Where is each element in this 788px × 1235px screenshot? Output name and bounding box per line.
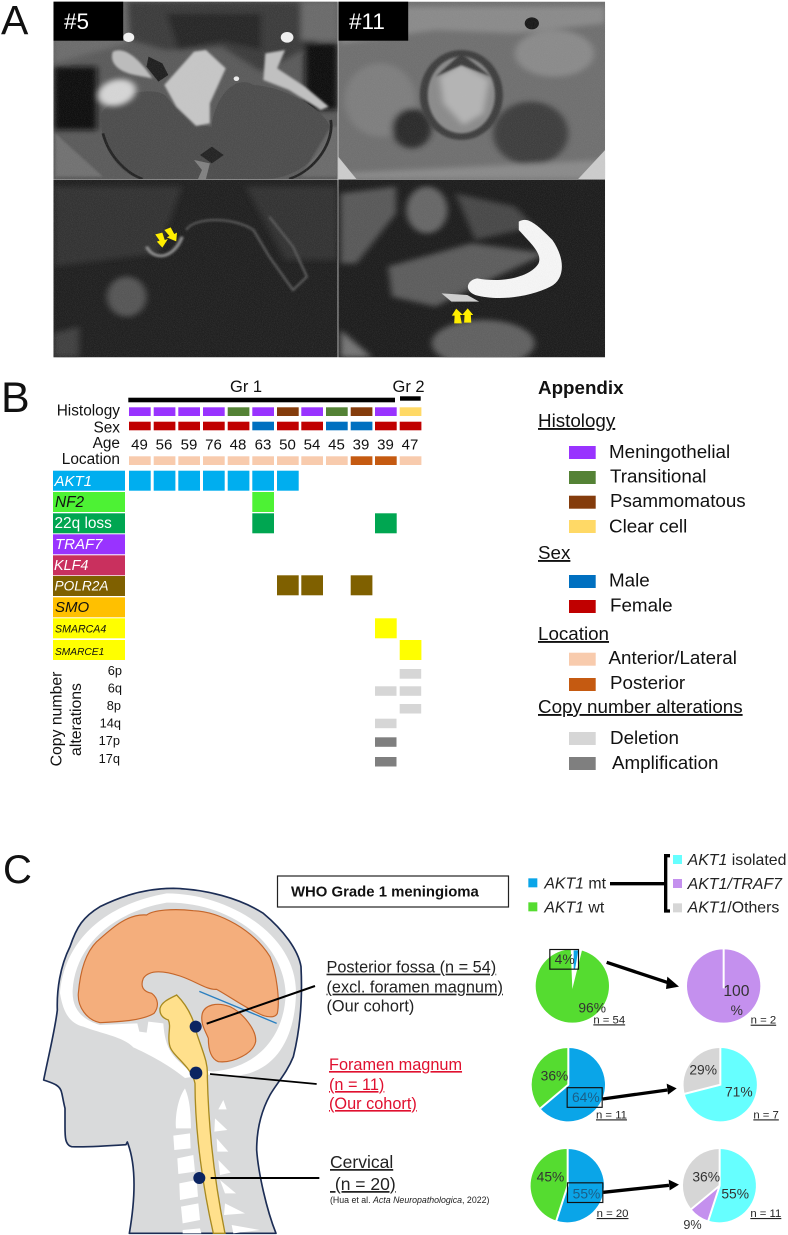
site label: foramen magnum: Foramen magnum: [329, 1056, 462, 1074]
MRI: case 11 CT myelography: [338, 179, 605, 367]
age row: 48: [230, 436, 246, 454]
copy number matrix: [375, 669, 421, 766]
site label: cervical: [330, 1152, 490, 1205]
site label: posterior fossa: [326, 959, 503, 1016]
appendix legend: Deletion: [610, 727, 679, 748]
pie: cervical co-mutation: 55%: [721, 1185, 749, 1201]
case label 5: #5: [64, 9, 89, 34]
pie: posterior fossa co-mutation: [687, 948, 776, 1027]
gene labels: SMO: [55, 599, 90, 616]
row labels: Age: [93, 435, 120, 452]
yellow arrows: case 11: [452, 308, 473, 323]
case label 11: [338, 2, 408, 41]
appendix legend: Psammomatous: [610, 490, 746, 511]
age row: 39: [353, 436, 369, 454]
appendix legend: Posterior: [610, 672, 685, 693]
site label: cervical: (n = 20): [330, 1174, 396, 1194]
gene labels: NF2: [55, 494, 85, 511]
pie: posterior fossa AKT1: 4%: [555, 951, 575, 967]
site markers: [190, 1021, 205, 1184]
pie: posterior fossa AKT1: 96%: [578, 1000, 606, 1016]
age row: 45: [328, 436, 345, 454]
appendix legend: Amplification: [612, 752, 718, 773]
arrow: [603, 1084, 677, 1099]
pie: cervical co-mutation: [683, 1148, 781, 1232]
copy number labels: 17p: [99, 733, 120, 748]
appendix legend: [538, 377, 746, 773]
histology track: [129, 407, 421, 416]
appendix legend: Appendix: [538, 377, 624, 398]
copy number labels: 8p: [107, 698, 121, 713]
gene labels: 22q loss: [54, 515, 112, 532]
panel label B: B: [1, 374, 30, 422]
site label: foramen magnum: (Our cohort): [329, 1095, 417, 1113]
pie: cervical co-mutation: 36%: [692, 1169, 720, 1185]
dura: [73, 903, 286, 1072]
pie: foramen magnum AKT1: 36%: [541, 1067, 568, 1083]
site label: foramen magnum: (n = 11): [329, 1076, 384, 1094]
appendix legend: Copy number alterations: [538, 696, 743, 717]
case label 5: [54, 2, 123, 41]
age row: 49: [131, 436, 148, 454]
pie: foramen magnum AKT1: 64%: [572, 1089, 600, 1105]
gene labels: TRAF7: [55, 536, 103, 553]
copy number labels: 17q: [99, 751, 120, 766]
copy number labels: 6p: [108, 663, 122, 678]
pie: cervical AKT1: [531, 1148, 628, 1222]
gene labels: KLF4: [54, 558, 88, 574]
row labels: Sex: [93, 420, 120, 436]
legend bracket: [610, 856, 670, 911]
pie: foramen magnum AKT1: n = 11: [596, 1109, 627, 1121]
grade headers: [128, 378, 425, 402]
copy number labels: [48, 663, 122, 766]
sex track: [129, 422, 421, 430]
title box: WHO grade: WHO Grade 1 meningioma: [291, 885, 480, 901]
grade headers: Gr 1: [230, 378, 262, 396]
title box: WHO grade: [278, 876, 508, 907]
appendix legend: Meningothelial: [609, 441, 730, 462]
legend: co-mutation: AKT1 isolated: [687, 852, 786, 869]
appendix legend: Clear cell: [609, 516, 687, 537]
legend: AKT1 status: AKT1 mt: [543, 875, 607, 892]
gene labels: SMARCE1: [55, 647, 104, 658]
legend: co-mutation: AKT1/Others: [687, 900, 779, 917]
pie: cervical co-mutation: n = 11: [750, 1208, 781, 1220]
gene labels: AKT1: [54, 473, 92, 490]
copy number labels: alterations: [68, 683, 85, 756]
case label 11: #11: [349, 9, 385, 34]
panel label C: C: [3, 848, 32, 892]
appendix legend: Male: [609, 570, 650, 591]
legend: AKT1 status: [528, 875, 607, 916]
appendix legend: Anterior/Lateral: [608, 647, 737, 668]
age row: 47: [402, 436, 418, 454]
vertebrae: [173, 1088, 260, 1233]
panel A: MRI images: [53, 2, 605, 367]
pie: cervical AKT1: 55%: [573, 1185, 600, 1201]
pie: posterior fossa AKT1: n = 54: [593, 1014, 625, 1026]
MRI: case 11 axial contrast: [338, 2, 605, 179]
pie: posterior fossa AKT1: [536, 948, 625, 1026]
pie: foramen magnum AKT1: [532, 1047, 627, 1121]
cerebellum: [202, 1004, 256, 1062]
head outline: [44, 888, 301, 1233]
gene labels: [53, 471, 125, 660]
location track: [129, 456, 421, 465]
pie: foramen magnum co-mutation: n = 7: [753, 1109, 779, 1121]
gene labels: SMARCA4: [55, 624, 106, 636]
pie: cervical co-mutation: 9%: [683, 1218, 702, 1232]
legend: AKT1 status: AKT1 wt: [543, 899, 605, 916]
pie: posterior fossa co-mutation: 100: [723, 983, 750, 1000]
appendix legend: Location: [538, 623, 609, 644]
copy number labels: 6q: [108, 680, 122, 696]
grade headers: Gr 2: [392, 378, 425, 396]
site label: cervical: (Hua et al. Acta Neuropathologica, 2022): [330, 1195, 490, 1205]
panel B: oncoprint: [48, 378, 425, 766]
pie charts and legend: [528, 852, 786, 1232]
appendix legend: Transitional: [610, 466, 706, 487]
row labels: Location: [62, 451, 120, 468]
site label: cervical: Cervical: [330, 1152, 393, 1172]
copy number labels: 14q: [100, 716, 121, 730]
appendix legend: Sex: [538, 542, 571, 563]
age row: 54: [304, 436, 320, 454]
yellow arrows: case 5: [155, 227, 177, 248]
pie: cervical AKT1: n = 20: [597, 1208, 628, 1220]
age row: 56: [156, 436, 172, 454]
MRI: case 5 CISS: [53, 179, 338, 357]
age row: 39: [377, 436, 394, 454]
MRI: case 5 axial contrast: [53, 2, 338, 179]
age row: 63: [255, 436, 271, 454]
row labels: [57, 402, 120, 468]
pie: foramen magnum co-mutation: 29%: [689, 1061, 717, 1077]
age row: [131, 436, 418, 454]
site label: posterior fossa: (excl. foramen magnum): [326, 979, 503, 997]
arrow: [603, 1180, 679, 1192]
mutation matrix: [129, 471, 421, 660]
site label: posterior fossa: (Our cohort): [326, 998, 414, 1016]
age row: 50: [279, 436, 296, 454]
age row: 76: [205, 436, 222, 454]
arrow: [607, 962, 679, 989]
pie: foramen magnum co-mutation: [684, 1047, 779, 1121]
site label: foramen magnum: [329, 1056, 462, 1113]
pie: cervical AKT1: 45%: [537, 1169, 564, 1185]
row labels: Histology: [57, 402, 120, 420]
age row: 59: [181, 436, 197, 454]
legend: co-mutation: [673, 852, 786, 917]
anatomy illustration: head and spine: [44, 888, 319, 1233]
gene labels: POLR2A: [54, 579, 109, 594]
skull band: [60, 893, 296, 1078]
brainstem and spinal cord: [160, 995, 225, 1233]
pie: foramen magnum co-mutation: 71%: [725, 1084, 753, 1100]
pie: posterior fossa co-mutation: %: [731, 1002, 743, 1018]
pie: posterior fossa co-mutation: n = 2: [751, 1015, 776, 1027]
site label: posterior fossa: Posterior fossa (n = 54): [326, 959, 496, 977]
cerebrum: [78, 910, 278, 1023]
appendix legend: Female: [610, 595, 673, 616]
legend: co-mutation: AKT1/TRAF7: [687, 876, 783, 893]
appendix legend: Histology: [538, 410, 616, 431]
tentorium line: [199, 991, 277, 1023]
leader lines: [207, 986, 319, 1178]
copy number labels: Copy number: [48, 672, 66, 766]
